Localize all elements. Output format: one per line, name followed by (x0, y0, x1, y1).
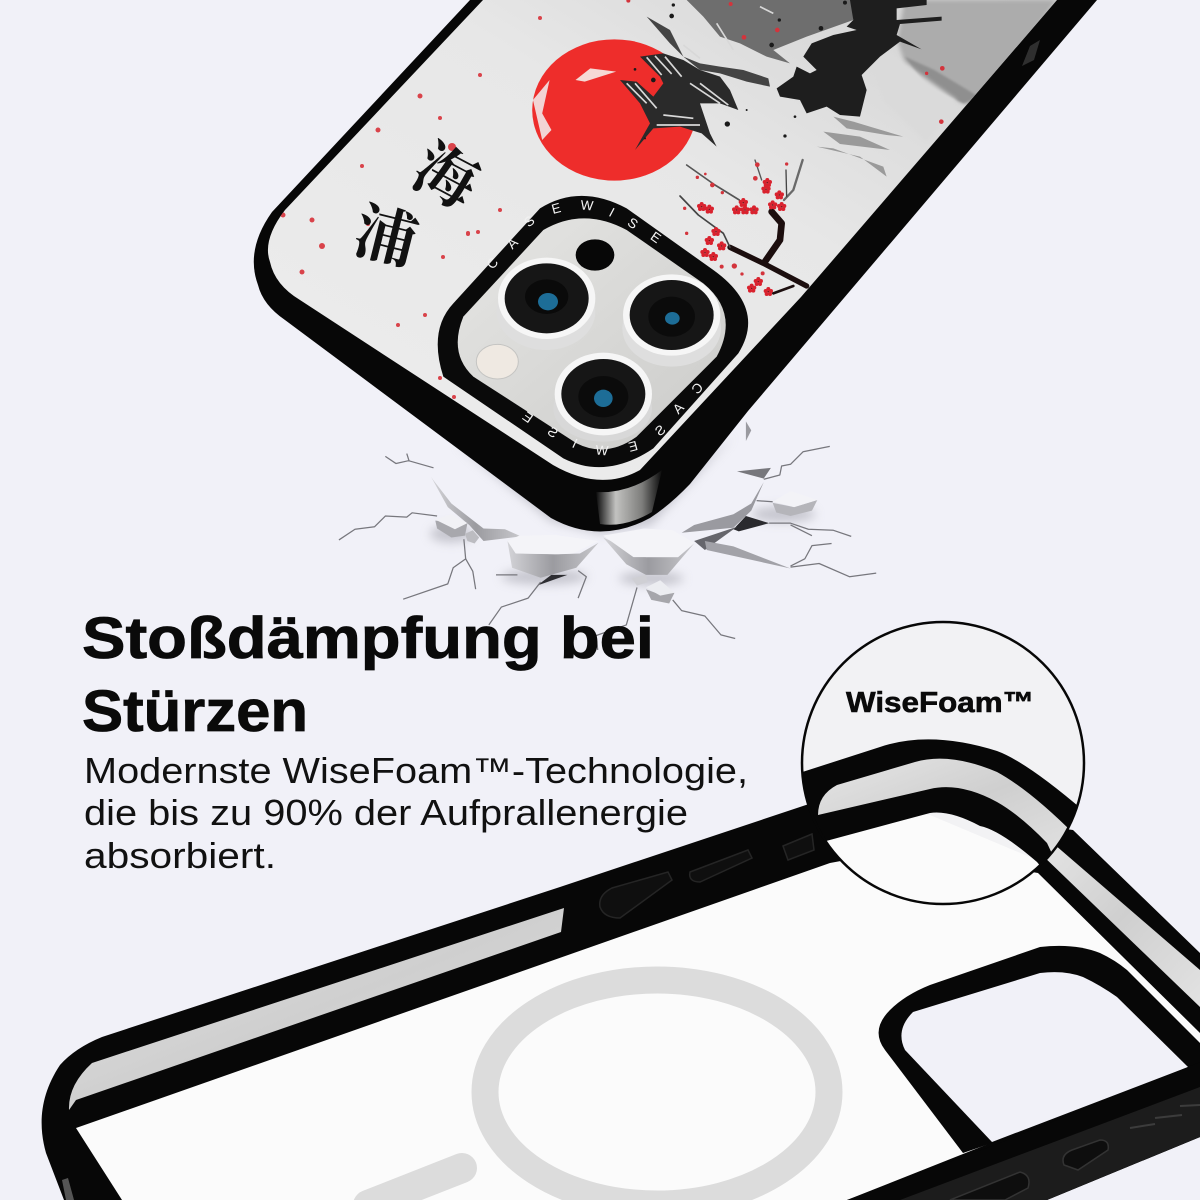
magnifier callout (800, 620, 1086, 906)
cracked wall impact (339, 421, 876, 650)
titanium camera plate (458, 218, 726, 449)
calligraphy: 浦 (347, 197, 424, 278)
camera bumper ring (438, 196, 748, 467)
crack shadow (430, 436, 816, 586)
CASEWISE ring lettering: C (484, 255, 501, 272)
side foam strip right (1040, 832, 1200, 1007)
ink artwork (280, 0, 1056, 399)
case side button (1022, 40, 1040, 66)
small rock debris (435, 491, 817, 603)
CASEWISE ring lettering: S (521, 213, 538, 230)
body text: Modernste WiseFoam™-Technologie, (84, 750, 748, 791)
blossoms (697, 178, 786, 296)
side foam strip left (69, 908, 564, 1110)
LiDAR sensor (576, 239, 614, 271)
pagoda and warriors art (620, 0, 945, 177)
CASEWISE ring lettering (484, 197, 706, 459)
loose petals (683, 162, 788, 276)
bevel texture (1130, 1105, 1200, 1128)
CASEWISE ring lettering: S (625, 215, 641, 232)
samurai silhouette (777, 0, 942, 117)
CASEWISE ring lettering: S (545, 424, 561, 441)
camera cutout frame (879, 946, 1200, 1153)
CASEWISE ring lettering: S (652, 422, 669, 439)
bottom edge slit (62, 1178, 74, 1200)
magnified case corner (804, 739, 1076, 902)
bottom frame lower bevel (900, 1087, 1200, 1200)
clear back panel (76, 850, 1200, 1200)
lens three (553, 353, 652, 442)
magsafe ring (485, 980, 829, 1200)
lens one (497, 258, 595, 350)
heading (82, 606, 654, 744)
foggy forest (897, 0, 1056, 106)
red paint flecks (626, 0, 945, 124)
case corner highlight (596, 470, 662, 525)
printed case face (268, 0, 1057, 480)
camera island (438, 196, 748, 467)
calligraphy: 海 (402, 133, 488, 222)
heading: Stoßdämpfung bei (82, 606, 654, 671)
roof strokes lower (647, 17, 770, 87)
CASEWISE ring lettering: C (688, 380, 706, 397)
side buttons top (600, 834, 814, 918)
side buttons bottom (950, 1140, 1108, 1200)
case frame silhouette (42, 797, 1200, 1200)
CASEWISE ring lettering: E (550, 200, 562, 217)
deep crack wedges (537, 516, 791, 586)
magnifier outline (802, 622, 1084, 904)
ink splatter (634, 1, 847, 139)
fractured rock right (603, 529, 694, 575)
top phone in case (254, 0, 1097, 531)
red sun (532, 39, 696, 181)
CASEWISE ring lettering: W (580, 197, 594, 214)
branch strokes (680, 160, 807, 293)
roof strokes upper (620, 53, 738, 150)
CASEWISE ring lettering: W (595, 442, 609, 459)
CASEWISE ring lettering: I (607, 205, 617, 220)
distant pagoda (817, 117, 903, 177)
WiseFoam label: WiseFoam™ (846, 687, 1034, 719)
CASEWISE ring lettering: I (570, 436, 580, 451)
magnifier background (802, 622, 1084, 904)
body text: absorbiert. (84, 835, 276, 876)
left raised plate (431, 477, 521, 541)
calligraphy (356, 138, 482, 268)
lens two (622, 274, 721, 367)
body text: die bis zu 90% der Aufprallenergie (84, 792, 688, 833)
CASEWISE ring lettering: E (627, 438, 639, 455)
scattered red dots (280, 16, 542, 399)
magsafe alignment bar (368, 1168, 462, 1200)
grey temple roof (687, 0, 853, 63)
feather streaks (627, 7, 773, 125)
heading: Stürzen (82, 679, 308, 744)
CASEWISE ring lettering: A (670, 400, 687, 417)
phone case body (254, 0, 1097, 532)
right raised plate (682, 421, 771, 533)
camera cutout opening (901, 972, 1188, 1142)
CASEWISE ring lettering: A (504, 235, 521, 252)
cherry branch (680, 160, 807, 296)
hairline cracks (339, 446, 876, 650)
CASEWISE ring lettering: E (520, 409, 536, 426)
flash (476, 344, 518, 379)
clear case bottom (42, 797, 1200, 1200)
fractured rock left (507, 535, 598, 578)
CASEWISE ring lettering: E (648, 229, 664, 246)
body text (84, 750, 748, 876)
bottom frame edge (847, 1062, 1200, 1200)
